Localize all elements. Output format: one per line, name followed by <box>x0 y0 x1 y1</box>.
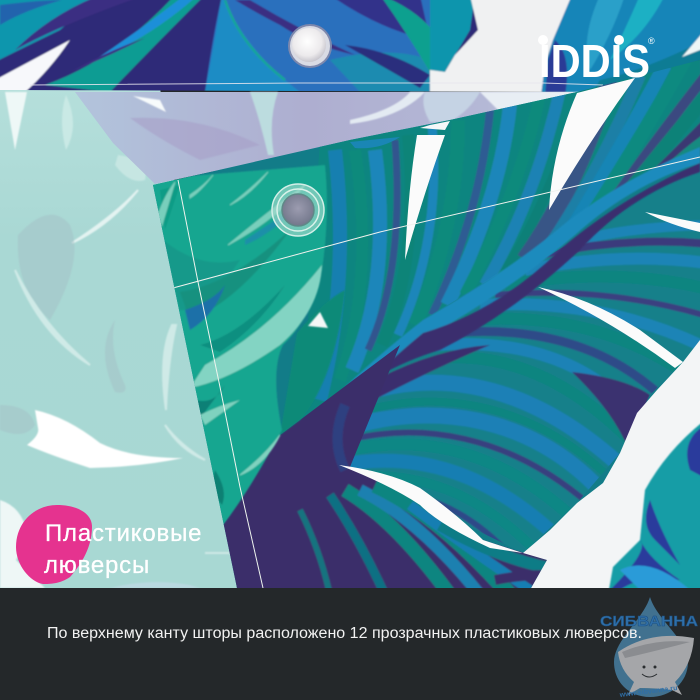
panel: front curtain with tropical leaves <box>140 50 700 595</box>
leaf: top left teal <box>0 0 91 61</box>
stitching: vertical <box>178 180 263 588</box>
brand text: СИБВАННА <box>600 613 698 630</box>
leaf: upper leaf fronds <box>304 60 700 416</box>
leaf: lower left dark purple base with streaks <box>220 340 560 595</box>
icon: clear plastic grommet <box>272 184 324 236</box>
logo: IDDIS: ® <box>648 36 655 46</box>
panel: dark footer bar <box>0 588 700 700</box>
white wedge left of strip <box>0 40 70 94</box>
leaf: dark green mid layer <box>280 290 345 435</box>
leaf: emerald and blue bands <box>45 0 205 92</box>
panel: back curtain mint layer <box>0 88 240 588</box>
stitching: horizontal <box>173 157 700 288</box>
pink blob <box>16 505 92 584</box>
leaf: emerald left leaf <box>140 165 328 525</box>
logo: IDDIS: IDDIS <box>539 35 650 87</box>
icon: metal snap button <box>288 24 332 68</box>
leaf: big central leaf body <box>350 220 700 549</box>
badge: pink blob with heading <box>16 505 202 584</box>
central streaks <box>440 357 630 440</box>
website text: www.sibvanna.ru <box>618 685 678 699</box>
heading: Пластиковые <box>45 520 202 547</box>
white print background right <box>523 340 700 590</box>
panel: folded lavender underside <box>75 92 590 184</box>
stitching: top strip <box>30 83 603 85</box>
leaf: midrib bands <box>344 146 700 387</box>
leaf: blue leaf around snap <box>205 0 430 92</box>
panel: top curtain strip <box>0 0 700 96</box>
bathtub face <box>642 666 656 668</box>
watermark: Sibvanna water drop logo <box>600 597 698 699</box>
heading: люверсы <box>44 552 150 579</box>
caption text: По верхнему канту шторы расположено 12 прозрачных пластиковых люверсов. <box>47 625 642 642</box>
water drop <box>614 597 688 697</box>
leaf: white slits <box>339 78 700 553</box>
white background of the print <box>430 0 572 96</box>
leaf: top right blue <box>541 0 700 96</box>
leaf: lower right teal leaf <box>608 420 700 595</box>
bathtub <box>618 636 694 695</box>
upper right fan <box>560 225 700 245</box>
